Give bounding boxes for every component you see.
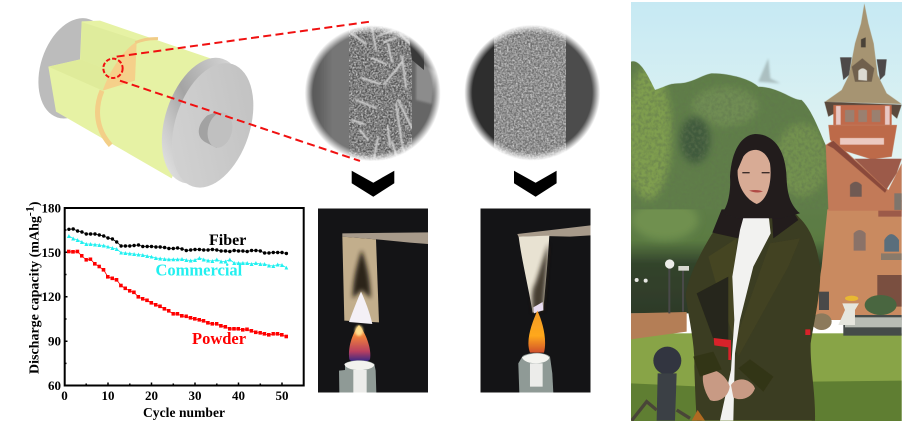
zoom lines xyxy=(117,22,370,161)
trees behind xyxy=(631,200,838,313)
series: commercial xyxy=(69,236,286,268)
red stripes xyxy=(714,329,810,360)
cutaway recess xyxy=(81,22,137,80)
y axis tick labels: 120 xyxy=(42,289,61,304)
y axis title: Discharge capacity (mAhg xyxy=(28,216,42,374)
portrait photo xyxy=(625,2,902,422)
separator strip xyxy=(342,237,379,322)
x axis title: Cycle number xyxy=(143,405,225,420)
SEM micrograph: fiber xyxy=(305,26,440,161)
lawn shadow xyxy=(631,381,902,422)
label: Commercial: Commercial xyxy=(156,261,243,280)
flame test photo: fiber separator xyxy=(318,208,428,393)
axis ticks xyxy=(64,208,282,386)
candle xyxy=(339,360,376,393)
y axis tick labels: 90 xyxy=(48,334,61,348)
tower xyxy=(824,3,902,211)
white shirt xyxy=(720,209,771,421)
zoom circle xyxy=(103,59,123,78)
x axis tick labels: 50 xyxy=(276,388,288,403)
fiber layer xyxy=(349,20,412,166)
sky xyxy=(631,2,902,202)
y axis tick labels: 150 xyxy=(42,245,61,260)
battery illustration xyxy=(26,9,370,198)
x axis tick labels: 10 xyxy=(102,388,114,403)
iron post xyxy=(632,347,705,421)
char mark xyxy=(532,243,549,313)
x axis tick labels: 0 xyxy=(61,388,68,403)
y axis tick labels: 180 xyxy=(42,200,61,216)
hedge xyxy=(631,312,687,339)
candle xyxy=(518,353,553,393)
battery terminal xyxy=(199,110,236,150)
powder layer xyxy=(494,20,566,166)
trees xyxy=(631,60,828,210)
face xyxy=(738,150,771,204)
label: Fiber: Fiber xyxy=(209,232,246,249)
y axis title: -1 xyxy=(22,206,36,216)
flame xyxy=(349,325,370,363)
separator band xyxy=(98,39,158,145)
battery body xyxy=(48,21,220,178)
tweezers xyxy=(517,225,591,237)
plot frame xyxy=(65,208,304,386)
y axis tick labels: 60 xyxy=(48,378,61,393)
flame test photo: powder separator xyxy=(480,208,591,393)
tweezers xyxy=(342,232,428,244)
series: powder xyxy=(69,252,286,337)
SEM micrograph: powder xyxy=(464,25,600,160)
y axis title: ) xyxy=(28,201,42,206)
street lamps xyxy=(635,259,689,313)
lawn xyxy=(631,333,902,422)
battery end face xyxy=(157,53,268,198)
separator strip xyxy=(519,236,549,313)
hair xyxy=(722,134,800,218)
chart: discharge capacity xyxy=(22,200,304,420)
burnt hole xyxy=(349,292,372,324)
bushes and balustrade xyxy=(865,295,897,315)
x axis tick labels xyxy=(61,388,288,403)
chevron arrow right xyxy=(514,171,557,197)
distant bare tree xyxy=(758,58,780,83)
battery left end cap xyxy=(26,9,120,128)
char mark xyxy=(353,250,371,298)
battery rim xyxy=(147,47,258,194)
background tree base xyxy=(631,170,806,230)
y axis tick labels xyxy=(42,200,61,393)
hair lower xyxy=(712,209,798,238)
x axis tick labels: 30 xyxy=(188,388,202,403)
x axis tick labels: 40 xyxy=(232,388,245,403)
chevron arrow left xyxy=(352,171,394,197)
coat xyxy=(686,209,820,421)
label: Powder: Powder xyxy=(192,329,246,348)
cuffs and hands xyxy=(703,369,730,401)
x axis tick labels: 20 xyxy=(145,388,158,403)
building lower xyxy=(813,200,902,320)
series: fiber xyxy=(69,229,286,254)
flame xyxy=(528,311,545,353)
